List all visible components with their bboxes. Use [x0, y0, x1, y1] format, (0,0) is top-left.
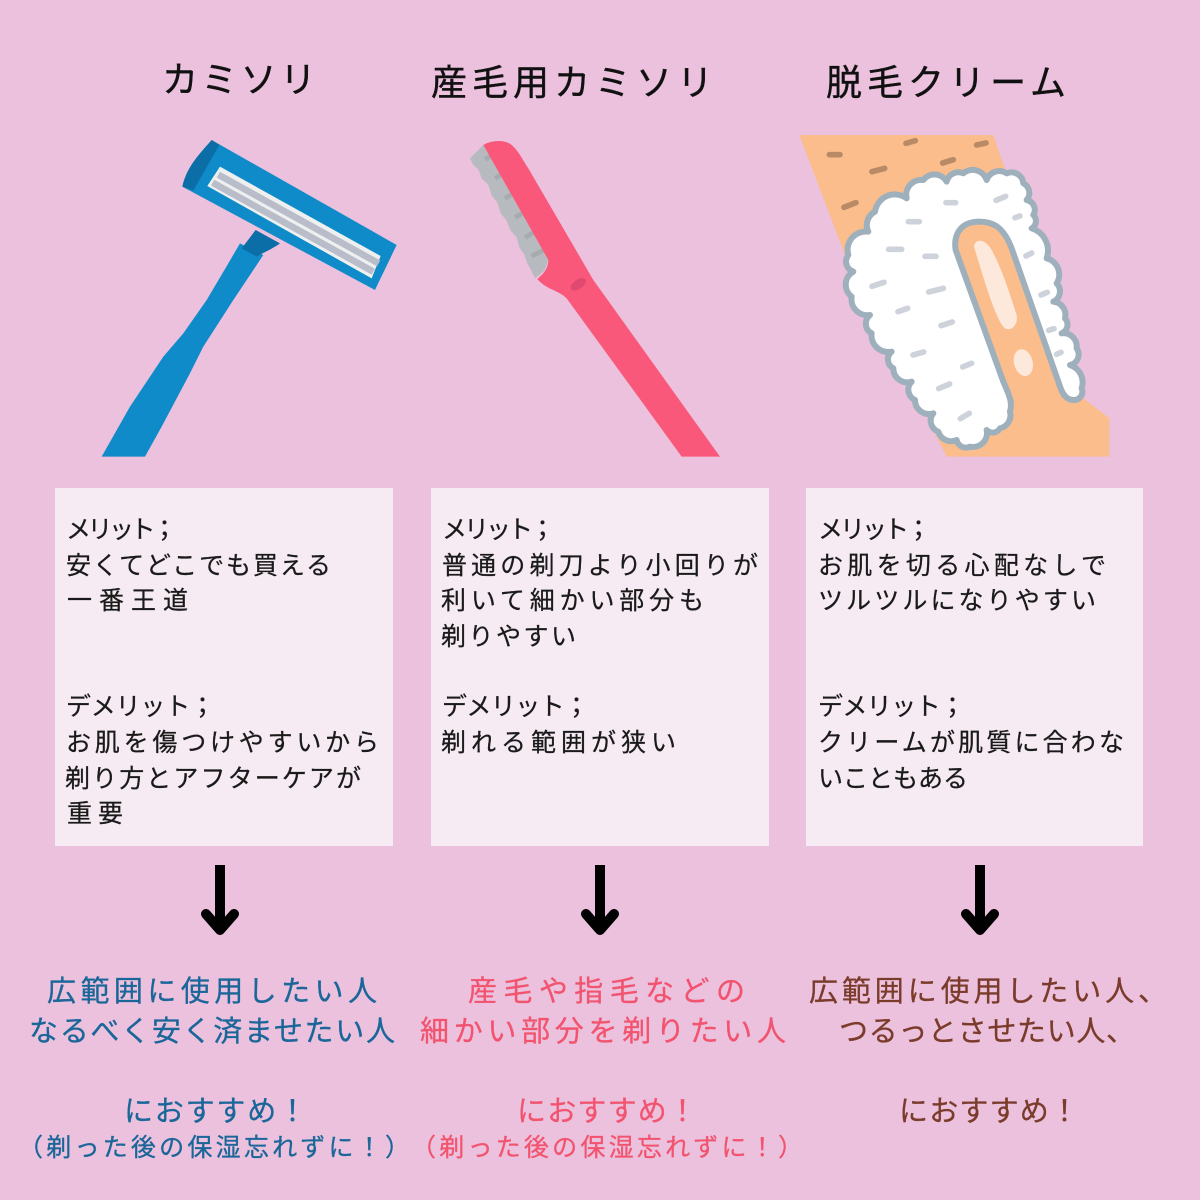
recommendation: 脱毛クリーム: 広範囲に使用したい人、 — [809, 975, 1167, 1008]
icon: pink facial razor — [470, 141, 720, 457]
recommendation: 産毛用カミソリ — [411, 975, 803, 1162]
panel: 産毛用カミソリ merits and demerits: メリット； — [442, 516, 555, 544]
recommendation: カミソリ — [18, 975, 410, 1162]
panel: 脱毛クリーム merits and demerits: お肌を切る心配なしで — [818, 552, 1106, 580]
recommendation: 産毛用カミソリ: 細かい部分を剃りたい人 — [420, 1015, 786, 1048]
recommendation: カミソリ: なるべく安く済ませたい人 — [29, 1015, 395, 1048]
recommendation: 脱毛クリーム: におすすめ！ — [899, 1096, 1079, 1128]
recommendation: カミソリ: 広範囲に使用したい人 — [47, 975, 377, 1008]
icon: blue razor — [102, 140, 397, 457]
icon: depilatory cream on skin — [799, 135, 1109, 457]
recommendation: カミソリ: におすすめ！ — [124, 1096, 307, 1128]
panel: カミソリ merits and demerits: 重要 — [67, 800, 123, 828]
panel: 脱毛クリーム merits and demerits: いこともある — [818, 765, 968, 793]
panel: 脱毛クリーム merits and demerits: デメリット； — [818, 693, 965, 721]
recommendation: 脱毛クリーム: つるっとさせたい人、 — [839, 1016, 1135, 1048]
recommendation: カミソリ: （剃った後の保湿忘れずに！） — [18, 1134, 410, 1162]
arrow: left column — [206, 865, 234, 930]
title: 脱毛クリーム: 脱毛クリーム — [826, 62, 1066, 103]
arrow: right column — [966, 865, 994, 930]
panel: カミソリ merits and demerits: メリット； — [66, 516, 177, 544]
recommendation: 産毛用カミソリ: 産毛や指毛などの — [468, 975, 745, 1008]
panel: 脱毛クリーム merits and demerits: ツルツルになりやすい — [818, 587, 1096, 615]
panel: 産毛用カミソリ merits and demerits — [431, 488, 769, 846]
panel: 脱毛クリーム merits and demerits — [806, 488, 1143, 846]
title: 産毛用カミソリ: 産毛用カミソリ — [431, 62, 713, 103]
recommendation: 脱毛クリーム — [809, 975, 1167, 1128]
panel: 産毛用カミソリ merits and demerits: デメリット； — [442, 693, 589, 721]
panel: カミソリ merits and demerits: 一番王道 — [67, 587, 188, 615]
panel: 産毛用カミソリ merits and demerits: 剃れる範囲が狭い — [441, 729, 676, 757]
arrow: middle column — [586, 865, 614, 930]
panel: 産毛用カミソリ merits and demerits: 剃りやすい — [441, 623, 576, 651]
panel: 脱毛クリーム merits and demerits: クリームが肌質に合わな — [818, 729, 1124, 757]
recommendation: 産毛用カミソリ: （剃った後の保湿忘れずに！） — [411, 1134, 803, 1162]
panel: 産毛用カミソリ merits and demerits: 普通の剃刀より小回りが — [442, 552, 758, 580]
panel: カミソリ merits and demerits: デメリット； — [66, 693, 215, 721]
panel: カミソリ merits and demerits — [55, 488, 393, 846]
title: カミソリ: カミソリ — [162, 59, 316, 100]
panel: 脱毛クリーム merits and demerits: メリット； — [818, 516, 931, 544]
panel: カミソリ merits and demerits: 剃り方とアフターケアが — [65, 765, 361, 793]
panel: カミソリ merits and demerits: お肌を傷つけやすいから — [66, 729, 379, 757]
panel: 産毛用カミソリ merits and demerits: 利いて細かい部分も — [441, 587, 704, 615]
recommendation: 産毛用カミソリ: におすすめ！ — [517, 1096, 697, 1128]
panel: カミソリ merits and demerits: 安くてどこでも買える — [66, 552, 331, 580]
